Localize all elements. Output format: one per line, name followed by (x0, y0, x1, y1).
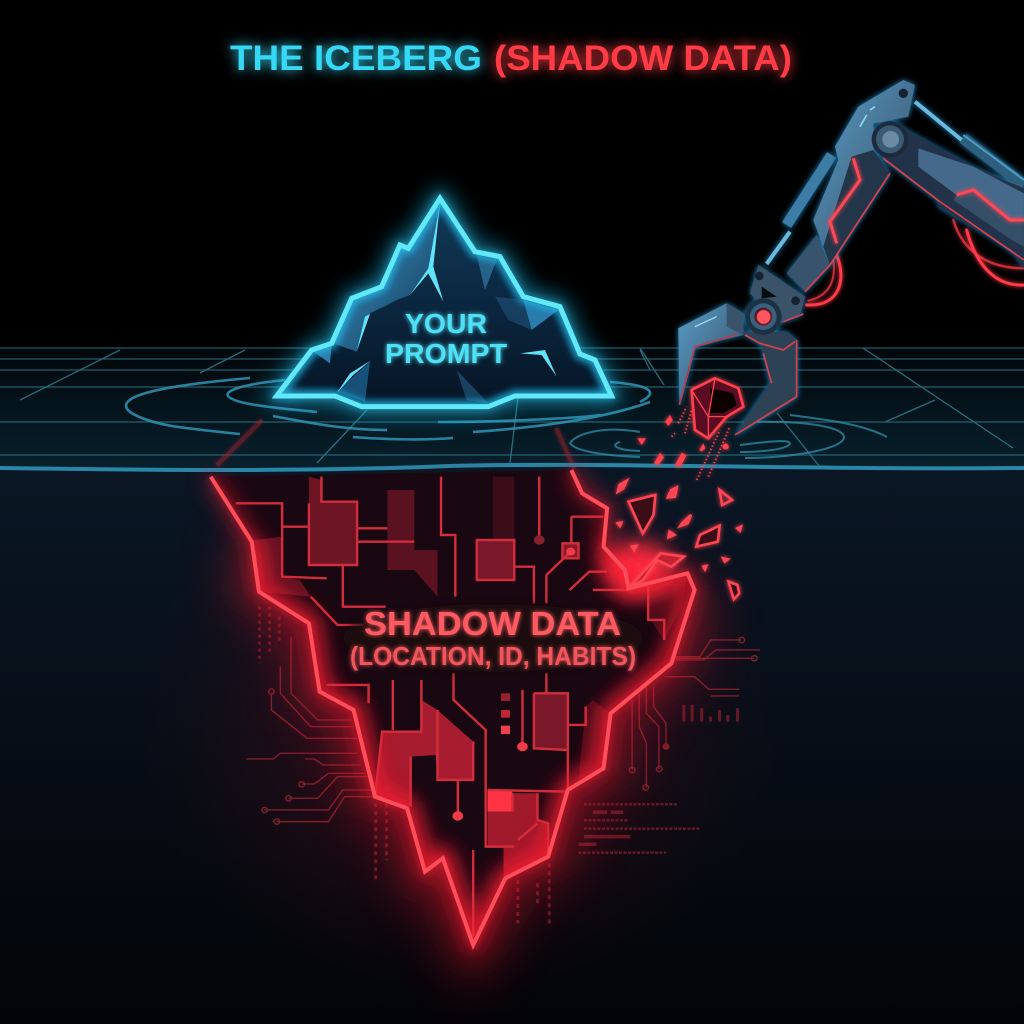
left claw (678, 303, 743, 405)
waterline (0, 465, 1024, 470)
label: your prompt: PROMPT (385, 338, 507, 369)
forearm (813, 80, 915, 265)
red cables (807, 220, 1024, 305)
wrist plate (750, 265, 805, 323)
ripples around claw (570, 415, 887, 458)
fracture hot spot (602, 542, 674, 594)
iceberg outline near glow (277, 198, 612, 407)
ripples around iceberg (126, 378, 650, 439)
label: your prompt: YOUR (405, 308, 487, 339)
inner edge glow (252, 542, 695, 945)
upper piston (915, 102, 1024, 185)
arm red light strips (757, 158, 1024, 324)
falling particles (637, 407, 730, 480)
title: (SHADOW DATA) (494, 39, 792, 78)
label: your prompt (385, 308, 507, 369)
breaking fragments (618, 481, 741, 599)
title (230, 39, 792, 78)
red halo (140, 440, 780, 1000)
iceberg body (277, 198, 612, 407)
right claw (735, 332, 797, 435)
ice facets (313, 202, 558, 403)
panel: iceberg tip (your prompt) (277, 198, 612, 407)
upper arm (880, 128, 1024, 268)
lower strut (787, 235, 830, 292)
outer glow (277, 198, 612, 407)
arm structure (678, 80, 1024, 435)
label: shadow data: (LOCATION, ID, HABITS) (350, 641, 636, 671)
iceberg outline (277, 198, 612, 407)
label: shadow data (350, 605, 636, 671)
wrist hub (745, 298, 782, 335)
berg outline glow (211, 470, 695, 945)
data bars and dotted code (260, 607, 737, 923)
inner cyan glow (277, 198, 612, 407)
berg outline near glow (211, 470, 695, 945)
circuit lines (236, 477, 664, 937)
panel: submerged shadow data iceberg (196, 458, 760, 1005)
panel: robotic arm (637, 80, 1024, 480)
water surface grid (0, 348, 1024, 467)
lower piston (767, 155, 832, 264)
elbow joint (872, 121, 908, 158)
title: THE ICEBERG (230, 39, 482, 78)
berg body (211, 470, 695, 945)
gripped red gem (692, 378, 743, 438)
outer circuit traces (246, 637, 760, 824)
red reflection streaks (217, 420, 574, 468)
berg outer wide glow (252, 542, 695, 945)
berg outline (211, 470, 695, 945)
dark backing behind label (343, 604, 643, 672)
label: shadow data: SHADOW DATA (364, 605, 621, 642)
circuit fills (254, 477, 687, 877)
ice crack highlights (337, 203, 557, 393)
